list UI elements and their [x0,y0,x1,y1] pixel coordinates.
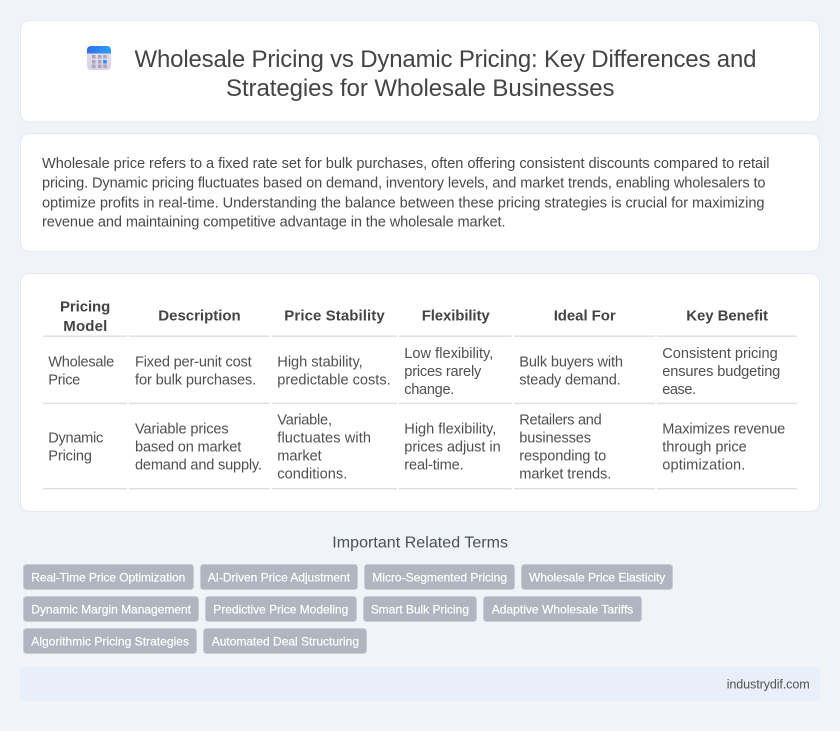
table row: wholesale price: steady demand. [519,373,621,389]
text block: introduction paragraph: revenue and maintaining competitive advantage in the wholesale market. [42,214,506,230]
table row: wholesale price: High stability, [277,355,363,371]
tag [200,564,358,590]
table row: dynamic pricing: demand and supply. [135,458,262,474]
tag [364,596,476,622]
tag [24,628,196,654]
tag: Real-Time Price Optimization [31,570,185,584]
table row: dynamic pricing: conditions. [277,467,347,483]
footer: industrydif.com [727,677,810,691]
tag [522,564,672,590]
panel: introduction [20,134,820,252]
table row: dynamic pricing: Variable, [277,413,332,429]
table row: wholesale price: Wholesale [48,355,114,371]
table header row: Ideal For [554,308,616,325]
table row: wholesale price: ease. [662,382,696,398]
tag: Dynamic Margin Management [31,602,192,616]
panel: comparison table [20,274,820,512]
tag: Smart Bulk Pricing [371,602,469,616]
text block: introduction paragraph: optimize profits in real-time. Understanding the balance between these pricing strategies is crucial for maximizing [42,196,764,212]
tag [364,564,514,590]
tag [24,596,198,622]
table row: dynamic pricing: prices adjust in [404,440,501,456]
table row: dynamic pricing: market trends. [519,467,611,483]
table row: dynamic pricing: based on market [135,440,241,456]
tag: Wholesale Price Elasticity [529,570,665,584]
table row: wholesale price: prices rarely [404,364,482,380]
table row: wholesale price: Price [48,373,80,389]
table row: dynamic pricing: responding to [519,449,606,465]
tag: Micro-Segmented Pricing [372,570,507,584]
table header row [60,299,768,335]
tag [206,596,356,622]
table row: dynamic pricing: real-time. [404,458,464,474]
panel: header [20,20,820,122]
text block: introduction paragraph [42,156,770,230]
icon: calendar [87,46,111,70]
tag: Adaptive Wholesale Tariffs [492,602,633,616]
heading: important related terms: Important Related Terms [332,534,508,551]
table header row: Price Stability [284,308,385,325]
title [134,46,756,102]
table row: wholesale price: for bulk purchases. [135,373,256,389]
table row: dynamic pricing: Maximizes revenue [662,422,785,438]
tag: Algorithmic Pricing Strategies [31,634,189,648]
table row: wholesale price: Low flexibility, [404,346,493,362]
table row: dynamic pricing: High flexibility, [404,422,496,438]
table row: wholesale price: Fixed per-unit cost [135,355,252,371]
tag: Automated Deal Structuring [212,634,359,648]
table row: dynamic pricing [48,413,785,483]
tag [484,596,642,622]
table row: wholesale price: change. [404,382,454,398]
title: Wholesale Pricing vs Dynamic Pricing: Key Differences and [134,46,756,73]
table row: dynamic pricing: businesses [519,431,591,447]
table row: dynamic pricing: Pricing [48,449,92,465]
table row: dynamic pricing: Dynamic [48,431,103,447]
tag [204,628,366,654]
table header row: Description [158,308,241,325]
table row: dynamic pricing: through price [662,440,747,456]
table row: wholesale price: predictable costs. [277,373,391,389]
table row: dynamic pricing: market [277,449,322,465]
table row: wholesale price: Bulk buyers with [519,355,623,371]
table header row: Pricing [60,299,110,316]
title: Strategies for Wholesale Businesses [226,75,614,102]
table row: wholesale price: Consistent pricing [662,346,778,362]
table row: wholesale price [48,346,780,398]
table row: dynamic pricing: Variable prices [135,422,229,438]
table header row: Flexibility [422,308,490,325]
text block: introduction paragraph: Wholesale price refers to a fixed rate set for bulk purchases, often offering consistent discounts compared to retail [42,156,770,172]
tag: AI-Driven Price Adjustment [208,570,351,584]
text block: introduction paragraph: pricing. Dynamic pricing fluctuates based on demand, inventory levels, and market trends, enabling wholesalers to [42,176,766,192]
table header row: Key Benefit [686,308,768,325]
tag list: related terms [24,564,672,654]
footer [20,667,820,701]
tag: Predictive Price Modeling [213,602,348,616]
tag [24,564,194,590]
table row: dynamic pricing: optimization. [662,458,745,474]
table row: dynamic pricing: fluctuates with [277,431,371,447]
table row: wholesale price: ensures budgeting [662,364,780,380]
table header row: Model [63,318,107,335]
table row: dynamic pricing: Retailers and [519,413,602,429]
